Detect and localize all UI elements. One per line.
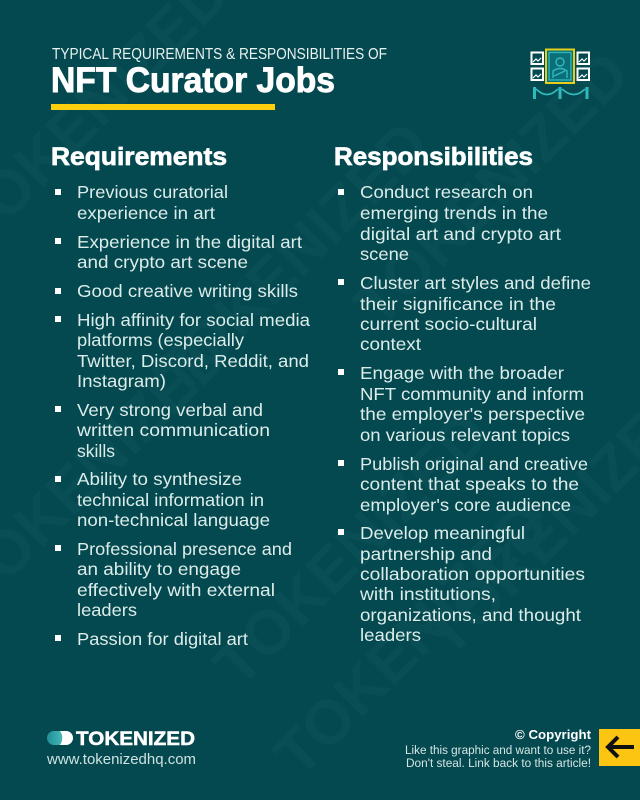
bullet: previous experience: Previous curatorial <box>77 182 228 202</box>
copyright notice: © Copyright <box>515 727 592 742</box>
bullet: content: content that speaks to the <box>360 474 579 494</box>
text: TOKENIZED <box>261 489 562 790</box>
bullet: art styles <box>338 273 591 354</box>
kicker text: TYPICAL REQUIREMENTS & RESPONSIBILITIES OF <box>52 46 387 63</box>
bullet: research: digital art and crypto art <box>360 224 561 244</box>
bullet: art styles: current socio-cultural <box>360 314 537 334</box>
title underline <box>51 104 275 110</box>
bullet: previous experience <box>55 182 228 223</box>
bullet: previous experience: experience in art <box>77 203 215 223</box>
bullet: research <box>338 182 561 264</box>
bullet: partnerships: organizations, and thought <box>360 605 581 625</box>
panel: responsibilities <box>334 143 591 645</box>
bullet: synthesize information: non-technical language <box>77 510 270 530</box>
logo wordmark: TOKENIZED <box>76 729 195 750</box>
bullet: research: Conduct research on <box>360 182 533 202</box>
bullet: passion: Passion for digital art <box>77 629 248 649</box>
bullet: content <box>338 454 588 515</box>
text: TOKENIZED <box>141 109 442 410</box>
logo: tokenized <box>46 729 196 768</box>
bullet: professional presence: effectively with external <box>77 580 275 600</box>
bullet: partnerships: Develop meaningful <box>360 523 525 543</box>
bullet: communication skills: Very strong verbal and <box>77 400 263 420</box>
bullet: partnerships: collaboration opportunities <box>360 564 585 584</box>
panel: requirements <box>51 143 310 649</box>
bullet: community: the employer's perspective <box>360 404 585 424</box>
copyright notice: Don't steal. Link back to this article! <box>406 756 591 770</box>
bullet: art styles: Cluster art styles and define <box>360 273 591 293</box>
bullet: professional presence: leaders <box>77 600 137 620</box>
bullet: content: Publish original and creative <box>360 454 588 474</box>
bullet: community: Engage with the broader <box>360 363 564 383</box>
bullet: art styles: their significance in the <box>360 294 556 314</box>
bullet: community: on various relevant topics <box>360 425 570 445</box>
bullet: digital art scene: Experience in the digital art <box>77 232 302 252</box>
bullet: partnerships <box>338 523 585 645</box>
bullet: social media: Twitter, Discord, Reddit, and <box>77 351 309 371</box>
bullet: writing skills: Good creative writing skills <box>77 281 298 301</box>
arrow button <box>599 729 640 766</box>
main title: NFT Curator Jobs <box>51 61 335 100</box>
bullet: research: emerging trends in the <box>360 203 548 223</box>
bullet: synthesize information: technical information in <box>77 490 264 510</box>
bullet: professional presence <box>55 539 292 620</box>
bullet: communication skills: written communication <box>76 420 270 440</box>
bullet: community <box>338 363 585 445</box>
text: TOKENIZED <box>341 39 640 340</box>
copyright notice <box>405 727 592 770</box>
bullet: social media: platforms (especially <box>77 330 244 350</box>
bullet: social media: Instagram) <box>77 371 166 391</box>
bullet: communication skills <box>55 400 270 461</box>
bullet: content: employer's core audience <box>360 495 571 515</box>
header: title block <box>51 46 387 110</box>
icon: framed portrait gallery with rope barrier <box>532 50 589 99</box>
bullet: art styles: context <box>360 334 421 354</box>
text: TOKENIZED <box>201 399 502 700</box>
bullet: digital art scene <box>55 232 302 272</box>
bullet: digital art scene: and crypto art scene <box>77 252 248 272</box>
bullet: social media: High affinity for social media <box>77 310 310 330</box>
bullet: communication skills: skills <box>77 441 115 461</box>
heading: requirements: Requirements <box>51 143 227 171</box>
bullet: partnerships: partnership and <box>360 544 492 564</box>
bullet: synthesize information: Ability to synthesize <box>77 469 242 489</box>
bullet: synthesize information <box>55 469 270 530</box>
bullet: social media <box>55 310 310 391</box>
copyright notice: Like this graphic and want to use it? <box>405 743 591 757</box>
icon: logo mark <box>47 731 73 745</box>
heading: responsibilities: Responsibilities <box>334 143 533 171</box>
bullet: research: scene <box>360 244 409 264</box>
bullet: professional presence: an ability to engage <box>77 559 241 579</box>
website url: www.tokenizedhq.com <box>46 752 196 768</box>
bullet: partnerships: with institutions, <box>359 584 496 604</box>
bullet: professional presence: Professional presence and <box>77 539 292 559</box>
bullet: community: NFT community and inform <box>360 384 584 404</box>
bullet: partnerships: leaders <box>360 625 421 645</box>
